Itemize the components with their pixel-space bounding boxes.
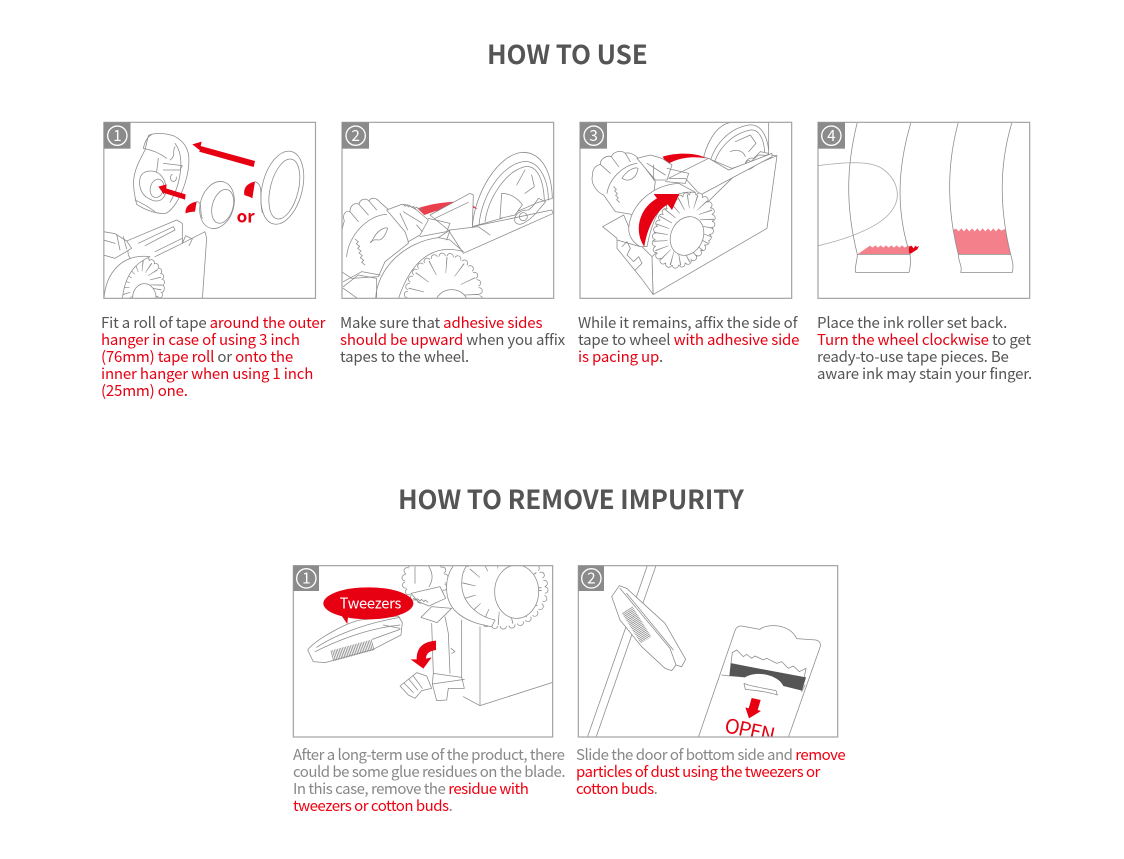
rail and base <box>430 193 553 253</box>
badge: 4: 4 <box>827 124 836 146</box>
text: impurity step 2: Slide the door of bottom side and remove <box>576 744 845 765</box>
dispenser body <box>641 152 777 294</box>
finger outline <box>818 163 897 246</box>
text: step 4 <box>817 312 1032 384</box>
dispenser <box>400 617 553 706</box>
text: impurity step 1: could be some glue residues on the blade. <box>293 761 565 782</box>
front wheel <box>447 554 545 627</box>
dispenser edge <box>587 566 656 737</box>
blade clip <box>411 587 452 623</box>
text: impurity step 1 <box>293 744 565 816</box>
blade clip <box>637 155 689 183</box>
text: step 3: is pacing up. <box>578 346 663 367</box>
text: step 1: inner hanger when using 1 inch <box>101 363 313 384</box>
back wheel <box>341 198 408 282</box>
large tape roll <box>244 150 304 225</box>
tweezers <box>612 586 686 671</box>
tape strips <box>849 122 1013 272</box>
tape strip <box>417 202 478 215</box>
badge: 3 <box>580 122 607 149</box>
badge: 2: 2 <box>351 124 360 146</box>
panel: step 1 fit tape roll <box>103 122 315 315</box>
ink mark on finger <box>909 246 919 254</box>
door <box>698 626 820 737</box>
text: step 1: (76mm) tape roll or onto the <box>101 346 293 367</box>
badge: 2: 2 <box>587 567 596 589</box>
text: impurity step 1: tweezers or cotton buds. <box>293 795 452 816</box>
text: step 4: aware ink may stain your finger. <box>817 363 1032 384</box>
text: step 2: should be upward when you affix <box>340 329 565 350</box>
callout: Tweezers <box>323 587 413 624</box>
text: impurity step 2: particles of dust using the tweezers or <box>576 761 820 782</box>
text: step 2: Make sure that adhesive sides <box>340 312 542 333</box>
text: step 2 <box>340 312 565 367</box>
heading: how to remove impurity: HOW TO REMOVE IMPURITY <box>398 480 744 517</box>
badge: 2 <box>342 122 369 149</box>
OPEN label: OPEN <box>722 710 777 748</box>
text: step 3 <box>578 312 799 367</box>
text: step 1 <box>101 312 326 401</box>
dispenser base <box>103 220 207 299</box>
text: step 4: Place the ink roller set back. <box>817 312 1007 333</box>
text: step 1: (25mm) one. <box>101 380 188 401</box>
text: step 2: tapes to the wheel. <box>340 346 469 367</box>
arrow: slide down <box>745 698 761 718</box>
arrow: to outer hanger <box>192 142 255 167</box>
text: step 1: Fit a roll of tape around the outer <box>101 312 325 333</box>
panel: step 2 adhesive side up <box>341 122 554 299</box>
heading: how to use: HOW TO USE <box>487 35 648 72</box>
badge: 1: 1 <box>113 124 122 146</box>
back wheel <box>592 151 655 215</box>
arrow: clockwise <box>639 194 679 247</box>
badge: 1 <box>293 566 319 591</box>
arrow: to inner hanger <box>158 184 186 200</box>
text: impurity step 1: After a long-term use of the product, there <box>293 744 564 765</box>
blade clip <box>387 204 450 242</box>
panel: impurity step 1 tweezers <box>293 554 553 737</box>
text: step 4: ready-to-use tape pieces. Be <box>817 346 1009 367</box>
badge: 1: 1 <box>302 567 311 589</box>
rail <box>669 153 772 195</box>
front wheel <box>628 183 716 268</box>
text: impurity step 1: In this case, remove the residue with <box>293 778 528 799</box>
text: step 1: hanger in case of using 3 inch <box>101 329 300 350</box>
small tape roll <box>186 181 235 229</box>
badge: 1 <box>104 122 130 149</box>
text: impurity step 2: cotton buds. <box>576 778 657 799</box>
panel: step 4 ready-to-use tape <box>818 122 1030 298</box>
badge: 3: 3 <box>589 124 598 146</box>
panel: step 3 affix tape to wheel <box>580 122 792 298</box>
text: step 3: tape to wheel with adhesive side <box>578 329 799 350</box>
hanger illustration <box>134 134 189 213</box>
tape strip <box>662 154 706 163</box>
arrow: door swing <box>411 641 436 669</box>
badge: 4 <box>818 122 845 149</box>
inked tape right <box>953 228 1011 254</box>
panel: impurity step 2 door <box>578 566 838 748</box>
callout: Tweezers: Tweezers <box>340 593 401 614</box>
front wheel <box>343 230 483 298</box>
badge: 2 <box>578 566 604 591</box>
text: step 4: Turn the wheel clockwise to get <box>817 329 1031 350</box>
back wheel <box>405 559 445 601</box>
tweezers <box>308 616 402 663</box>
or label: or <box>237 203 255 228</box>
large roll <box>472 152 552 227</box>
text: step 3: While it remains, affix the side of <box>578 312 797 333</box>
large roll <box>704 122 769 168</box>
lower bracket <box>603 215 653 294</box>
tape wheel <box>104 256 165 298</box>
text: impurity step 2 <box>576 744 846 799</box>
inked tape left <box>857 245 910 254</box>
